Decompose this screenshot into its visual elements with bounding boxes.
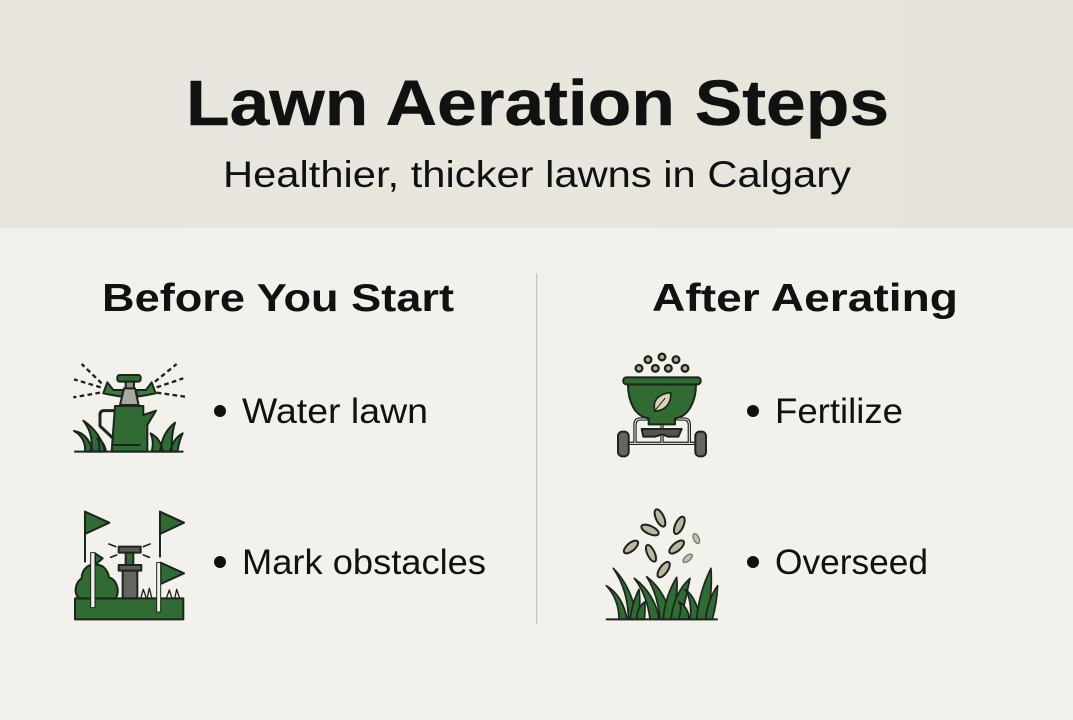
label: overseed: Overseed xyxy=(775,543,928,582)
label: fertilize: Fertilize xyxy=(775,392,903,431)
header band xyxy=(0,0,1073,228)
icon: sprinkler watering can xyxy=(73,364,185,452)
title: Lawn Aeration Steps xyxy=(186,67,889,139)
heading: after aerating: After Aerating xyxy=(652,277,958,320)
heading: before you start: Before You Start xyxy=(102,277,454,320)
icon: fertilizer spreader xyxy=(618,354,706,456)
icon: flags and sprinkler head xyxy=(75,512,184,619)
icon: seeds falling on grass xyxy=(606,508,718,619)
label: mark obstacles: Mark obstacles xyxy=(242,543,486,582)
label: water lawn: Water lawn xyxy=(242,392,428,431)
subtitle: Healthier, thicker lawns in Calgary xyxy=(223,154,852,195)
column divider xyxy=(536,273,537,624)
